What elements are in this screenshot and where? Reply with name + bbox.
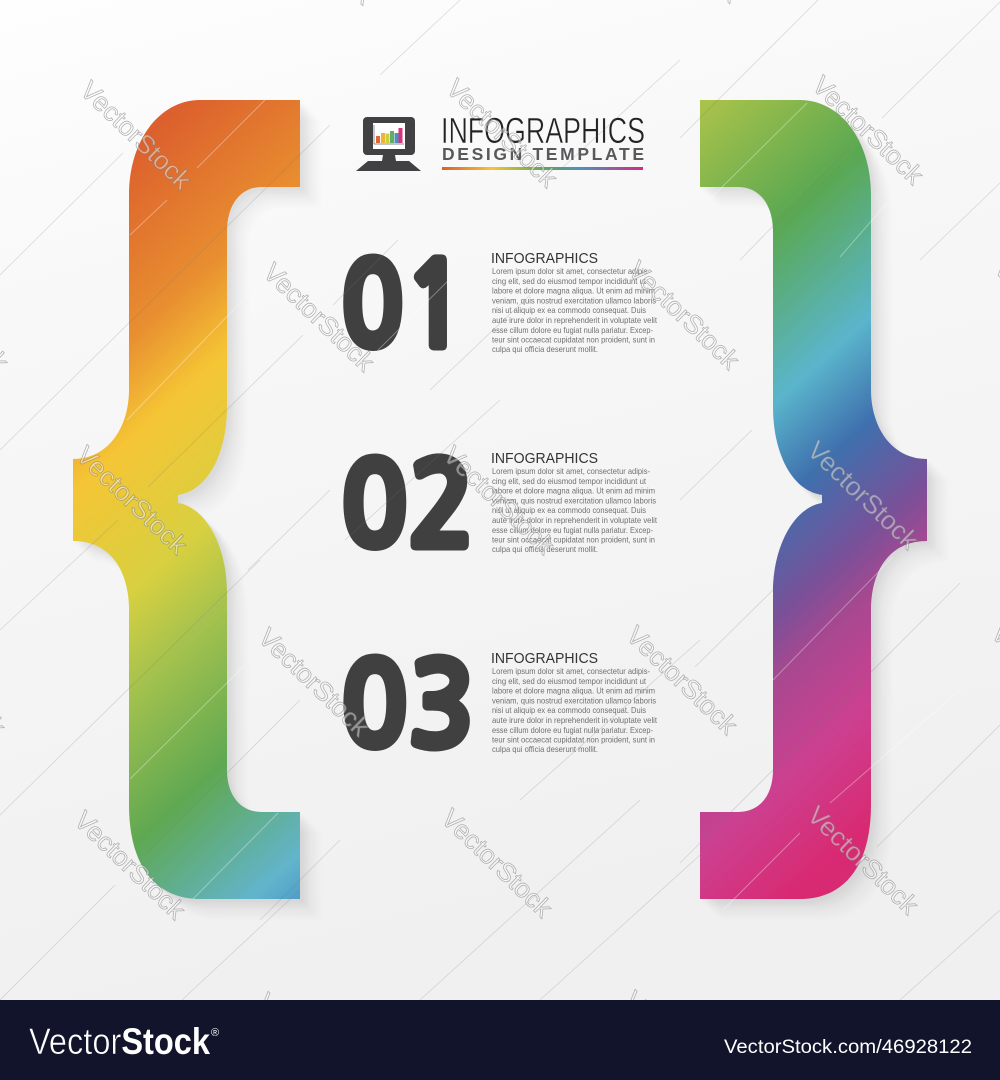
number 02: 02 [341, 449, 475, 564]
item 02 body text: nisi ut aliquip ex ea commodo consequat. Duis [492, 505, 646, 515]
item 01 body text: teur sint occaecat cupidatat non proident, sunt in [492, 334, 655, 344]
item 01 body text [492, 266, 658, 354]
item 02 body text: teur sint occaecat cupidatat non proident, sunt in [492, 534, 655, 544]
item 02 body text: cing elit, sed do eiusmod tempor incididunt ut [492, 476, 647, 486]
item 03 body text: nisi ut aliquip ex ea commodo consequat. Duis [492, 705, 646, 715]
title [441, 110, 645, 164]
right curly bracket [700, 100, 927, 899]
item 01 heading: INFOGRAPHICS [491, 250, 598, 267]
watermarks: VectorStock [807, 70, 930, 191]
item 02 body text: Lorem ipsum dolor sit amet, consectetur adipis- [492, 466, 650, 476]
item 03 body text: teur sint occaecat cupidatat non proident, sunt in [492, 734, 655, 744]
watermarks: VectorStock [621, 620, 744, 741]
item 03 body text: cing elit, sed do eiusmod tempor incididunt ut [492, 676, 647, 686]
footer url: VectorStock.com/46928122 [724, 1036, 972, 1058]
item 01 body text: culpa qui officia deserunt mollit. [492, 344, 598, 354]
watermarks: VectorStock [441, 73, 564, 194]
number 01: 01 [341, 249, 467, 364]
watermarks: VectorStock [253, 622, 376, 743]
title: INFOGRAPHICS [441, 110, 645, 151]
item 03 body text: aute irure dolor in reprehenderit in voluptate velit [492, 715, 658, 725]
item 01 body text: nisi ut aliquip ex ea commodo consequat. Duis [492, 305, 646, 315]
item 03 [341, 649, 658, 764]
item 03 body text: labore et dolore magna aliqua. Ut enim ad minim [492, 686, 655, 696]
watermarks: VectorStock [75, 75, 198, 196]
item 01 body text: Lorem ipsum dolor sit amet, consectetur adipis- [492, 266, 650, 276]
item 03 body text: culpa qui officia deserunt mollit. [492, 744, 598, 754]
watermarks: VectorStock [623, 255, 746, 376]
left bracket long shadow [77, 104, 320, 919]
item 01 body text: cing elit, sed do eiusmod tempor incididunt ut [492, 276, 647, 286]
watermarks: VectorStock [438, 440, 561, 561]
item 03 body text: esse cillum dolore eu fugiat nulla pariatur. Excep- [492, 725, 653, 735]
footer logo: VectorStock [29, 1021, 210, 1062]
watermarks: VectorStock [258, 257, 381, 378]
icon: computer monitor with bar chart [356, 117, 421, 171]
item 02 body text [492, 466, 658, 554]
item 03 body text [492, 666, 658, 754]
footer registered mark: ® [211, 1027, 219, 1039]
item 02 body text: culpa qui officia deserunt mollit. [492, 544, 598, 554]
rainbow rule [442, 167, 643, 170]
item 01 body text: labore et dolore magna aliqua. Ut enim ad minim [492, 286, 655, 296]
watermarks: VectorStock [69, 805, 192, 926]
item 02 body text: veniam, quis nostrud exercitation ullamco laboris [492, 496, 656, 506]
item 01 body text: aute irure dolor in reprehenderit in voluptate velit [492, 315, 658, 325]
watermarks: VectorStock [71, 440, 194, 561]
watermarks: VectorStock [802, 800, 925, 921]
item 02 [341, 449, 658, 564]
left curly bracket [73, 100, 300, 899]
right bracket long shadow [704, 104, 947, 919]
subtitle: DESIGN TEMPLATE [442, 144, 644, 164]
item 03 heading: INFOGRAPHICS [491, 650, 598, 667]
footer bar [0, 1000, 1000, 1080]
item 01 [341, 249, 658, 364]
item 02 body text: aute irure dolor in reprehenderit in voluptate velit [492, 515, 658, 525]
item 01 body text: esse cillum dolore eu fugiat nulla pariatur. Excep- [492, 325, 653, 335]
item 01 body text: veniam, quis nostrud exercitation ullamco laboris [492, 296, 656, 306]
item 02 body text: labore et dolore magna aliqua. Ut enim ad minim [492, 486, 655, 496]
watermarks: VectorStock [802, 435, 925, 556]
item 02 body text: esse cillum dolore eu fugiat nulla pariatur. Excep- [492, 525, 653, 535]
item 03 body text: veniam, quis nostrud exercitation ullamco laboris [492, 696, 656, 706]
number 03: 03 [341, 649, 475, 764]
item 03 body text: Lorem ipsum dolor sit amet, consectetur adipis- [492, 666, 650, 676]
watermarks: VectorStock [436, 803, 559, 924]
item 02 heading: INFOGRAPHICS [491, 450, 598, 467]
